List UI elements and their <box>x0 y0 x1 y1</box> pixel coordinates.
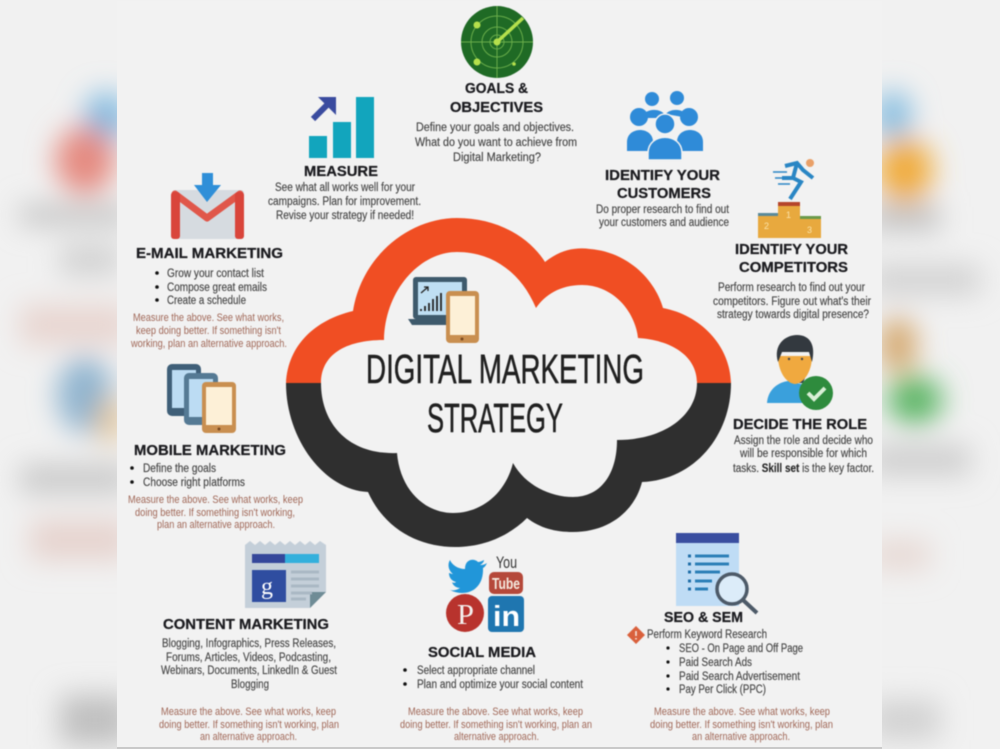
panel: e-mail marketing <box>130 173 287 350</box>
heading: seo and sem: SEO & SEM <box>664 610 743 626</box>
panel: mobile marketing <box>128 364 303 531</box>
list: seo tactics: Pay Per Click (PPC) <box>679 684 766 696</box>
icon: document with magnifier <box>676 533 757 613</box>
heading: mobile marketing: MOBILE MARKETING <box>134 443 286 459</box>
note: e-mail measure: keep doing better. If something isn't <box>136 325 281 337</box>
text: goals body: Digital Marketing? <box>453 152 541 164</box>
text: role body: Assign the role and decide who <box>734 435 873 447</box>
icon: bar chart with arrow <box>309 97 374 158</box>
icon: radar <box>461 6 533 78</box>
list: seo tactics: Paid Search Ads <box>679 657 752 669</box>
cloud title: DIGITAL MARKETING <box>366 346 644 392</box>
text: customers body: your customers and audience <box>599 217 729 229</box>
heading: e-mail marketing: E-MAIL MARKETING <box>136 246 283 262</box>
heading: identify your competitors: COMPETITORS <box>739 260 848 276</box>
icon: youtube: Tube <box>492 576 520 593</box>
text: measure body: campaigns. Plan for improvement. <box>268 196 421 208</box>
list: social actions: Plan and optimize your social content <box>417 679 584 691</box>
blurred background: left side <box>20 92 130 745</box>
list: mobile actions <box>130 463 245 489</box>
cloud: Digital Marketing Strategy <box>286 218 731 547</box>
list: social actions: Select appropriate channel <box>417 665 535 677</box>
list: seo tactics: SEO - On Page and Off Page <box>679 643 803 655</box>
heading: identify your customers: IDENTIFY YOUR <box>605 168 721 184</box>
panel: content marketing <box>159 541 339 743</box>
note: social measure: Measure the above. See what works, keep <box>408 706 583 718</box>
icon: linkedin: in <box>493 601 520 633</box>
heading: measure: MEASURE <box>304 164 378 180</box>
text: content types: Blogging <box>231 679 269 691</box>
note: content measure: doing better. If something isn't working, plan <box>159 719 339 731</box>
heading: goals <box>450 81 543 116</box>
list: social actions <box>403 665 584 691</box>
icon: warning diamond <box>627 626 645 644</box>
icon: gmail envelope with arrow <box>171 173 244 239</box>
heading: identify your competitors: IDENTIFY YOUR <box>735 242 849 258</box>
icon: podium with runner: 2 <box>764 221 769 231</box>
heading: social media: SOCIAL MEDIA <box>428 645 537 661</box>
panel: measure <box>268 97 421 222</box>
icon: laptop and tablet <box>408 277 479 343</box>
list: e-mail actions: Grow your contact list <box>167 268 265 280</box>
note: seo measure: doing better. If something isn't working, plan <box>650 719 833 731</box>
note: mobile measure <box>128 494 303 531</box>
heading: identify your competitors <box>735 242 849 276</box>
list: seo tactics: Paid Search Advertisement <box>679 671 801 683</box>
icon: google news page <box>245 541 326 608</box>
panel: seo and sem <box>627 533 833 743</box>
list: mobile actions: Choose right platforms <box>143 477 245 489</box>
note: content measure <box>159 706 339 743</box>
note: e-mail measure <box>130 312 287 350</box>
center panel background <box>117 1 882 747</box>
text: customers body: Do proper research to find out <box>596 204 730 216</box>
icon: podium with runner: 1 <box>786 210 791 220</box>
icon: pinterest <box>446 594 484 632</box>
text: goals body: Define your goals and objectives. <box>416 122 574 134</box>
icon: linkedin <box>488 596 524 633</box>
text: goals body <box>415 122 577 164</box>
text: content types: Forums, Articles, Videos, Podcasting, <box>166 652 331 664</box>
note: seo measure: Measure the above. See what works, keep <box>654 706 830 718</box>
list: e-mail actions <box>155 268 267 307</box>
text: measure body: Revise your strategy if needed! <box>276 210 414 222</box>
icon: group of people <box>627 91 703 160</box>
list: seo tactics <box>666 643 803 696</box>
text: role body: tasks. Skill set is the key factor. <box>733 463 874 475</box>
icon: podium with runner: 3 <box>807 225 812 235</box>
heading: goals: GOALS & <box>465 81 528 97</box>
icon: youtube <box>489 553 523 594</box>
cloud title: STRATEGY <box>427 395 563 441</box>
note: e-mail measure: Measure the above. See what works, <box>133 312 284 324</box>
heading: identify your customers <box>605 168 721 202</box>
note: social measure <box>400 706 592 743</box>
text: competitors body: strategy towards digital presence? <box>717 309 869 321</box>
icon: twitter bird <box>449 560 487 593</box>
text: content types: Blogging, Infographics, Press Releases, <box>162 638 336 650</box>
note: seo measure <box>650 706 833 743</box>
note: e-mail measure: working, plan an alternative approach. <box>130 338 287 350</box>
icon: podium with runner <box>758 159 821 238</box>
note: mobile measure: doing better. If something isn't working, <box>135 507 295 519</box>
note: content measure: an alternative approach. <box>200 731 297 743</box>
note: mobile measure: Measure the above. See what works, keep <box>128 494 303 506</box>
note: seo measure: an alternative approach. <box>692 731 790 743</box>
list: mobile actions: Define the goals <box>143 463 216 475</box>
text: competitors body: competitors. Figure out what's their <box>713 296 871 308</box>
text: customers body <box>596 204 730 229</box>
text: role body: will be responsible for which <box>739 448 867 460</box>
panel: decide the role <box>733 335 874 475</box>
icon: mobile devices <box>167 364 236 433</box>
icon: person with check <box>767 335 833 410</box>
text: role body <box>733 435 874 475</box>
text: content types <box>161 638 338 691</box>
panel: social media <box>400 553 592 743</box>
text: measure body <box>268 182 421 222</box>
list: e-mail actions: Compose great emails <box>167 282 267 294</box>
text: competitors body: Perform research to find out your <box>718 282 865 294</box>
note: social measure: alternative approach. <box>454 731 539 743</box>
heading: decide the role: DECIDE THE ROLE <box>733 417 867 433</box>
list: e-mail actions: Create a schedule <box>167 295 246 307</box>
text: keyword research: Perform Keyword Research <box>647 629 767 641</box>
panel: goals and objectives <box>415 6 577 164</box>
note: content measure: Measure the above. See what works, keep <box>161 706 336 718</box>
text: goals body: What do you want to achieve from <box>415 137 577 149</box>
icon: pinterest: P <box>457 599 474 631</box>
icon: youtube: You <box>496 553 517 572</box>
icon: google news page: g <box>261 574 273 600</box>
panel: identify your customers <box>596 91 730 229</box>
note: mobile measure: plan an alternative approach. <box>157 519 275 531</box>
blurred background: right side <box>870 91 980 740</box>
heading: identify your customers: CUSTOMERS <box>617 186 711 202</box>
text: measure body: See what all works well for your <box>275 182 415 194</box>
note: social measure: doing better. If something isn't working, plan an <box>400 719 592 731</box>
heading: goals: OBJECTIVES <box>450 100 543 116</box>
heading: content marketing: CONTENT MARKETING <box>163 617 329 633</box>
cloud title <box>366 346 644 441</box>
text: content types: Webinars, Documents, LinkedIn & Guest <box>161 665 338 677</box>
text: competitors body <box>713 282 871 321</box>
panel: identify your competitors <box>713 159 871 321</box>
